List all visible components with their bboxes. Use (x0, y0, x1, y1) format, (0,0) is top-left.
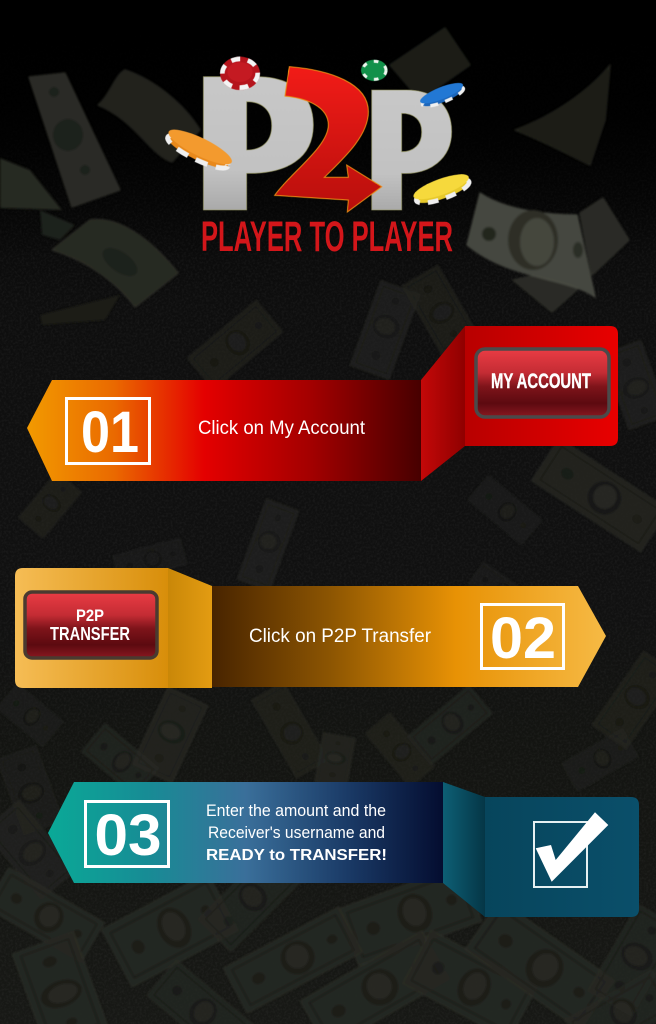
chip: blue (418, 79, 466, 110)
ribbon 02 (212, 586, 606, 687)
panel: step 02 (15, 568, 606, 688)
fold 01 (421, 326, 465, 481)
icon: checkbox with tick (534, 812, 608, 887)
tab 01 (465, 326, 618, 446)
button: my account (476, 349, 609, 417)
tab 02 (15, 568, 168, 688)
number box 03: 03 (94, 803, 162, 868)
first letter P (203, 77, 313, 210)
panel: step 01 (27, 326, 618, 481)
step 03 text: Enter the amount and the (206, 801, 386, 820)
numeral 2 with arrow (275, 67, 382, 212)
second letter P (372, 90, 452, 210)
number box 01: 01 (81, 400, 139, 465)
logo tagline: PLAYER TO PLAYER (201, 213, 453, 261)
panel: step 03 (48, 782, 639, 917)
step 03 text: READY to TRANSFER! (206, 847, 387, 864)
ribbon 03 (48, 782, 443, 883)
ribbon 01 (27, 380, 421, 481)
button: my account: MY ACCOUNT (491, 370, 591, 393)
bottom bills (0, 801, 77, 899)
top bills (29, 73, 120, 207)
button: p2p transfer: P2P (76, 606, 104, 625)
button: p2p transfer: TRANSFER (50, 624, 130, 644)
button: p2p transfer (25, 592, 157, 658)
number box 02: 02 (490, 606, 556, 671)
bright bill with portrait (580, 198, 629, 275)
tab 03 (485, 797, 639, 917)
chip: yellow (411, 169, 473, 208)
middle bills (187, 300, 283, 390)
logo: P2P with poker chips (163, 57, 473, 261)
step 03 text: Receiver's username and (208, 823, 385, 842)
chip: orange (163, 124, 236, 174)
chip: red (220, 57, 260, 90)
step 03 text (206, 801, 387, 864)
step 02 text: Click on P2P Transfer (249, 626, 432, 647)
fold 02 (168, 568, 212, 688)
step 01 text: Click on My Account (198, 418, 366, 439)
chip: green (361, 60, 388, 81)
fold 03 (443, 782, 485, 917)
